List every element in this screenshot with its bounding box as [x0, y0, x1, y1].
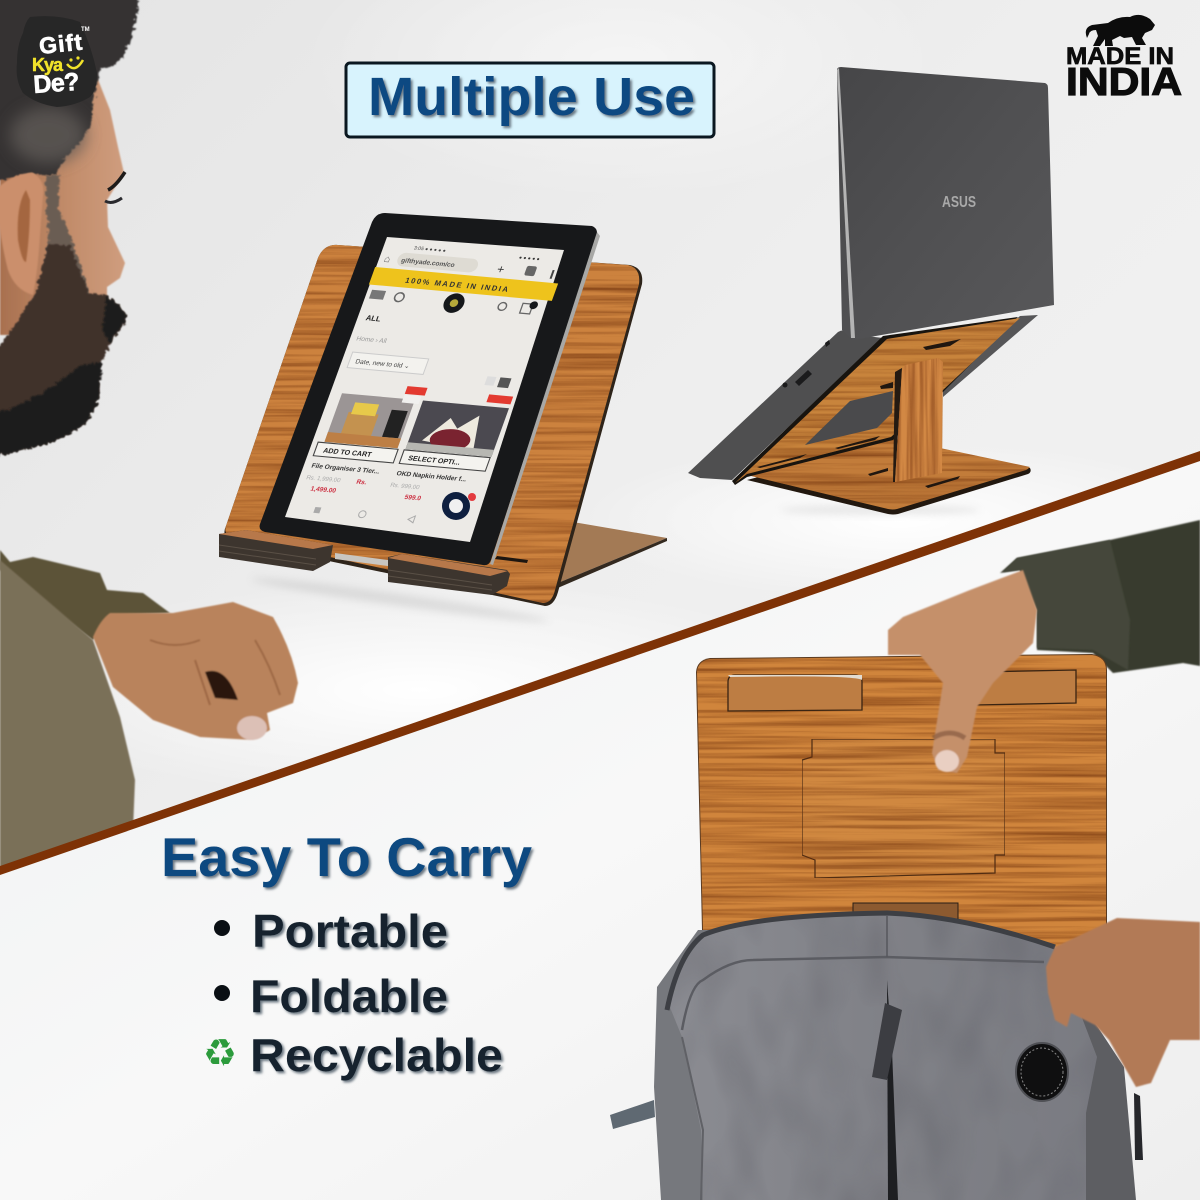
- head: [0, 0, 138, 460]
- item: Recyclable: ♻: [203, 1031, 237, 1075]
- folded wooden stand: [696, 654, 1107, 950]
- brow and lash: [108, 172, 125, 190]
- back panel: [1080, 1000, 1136, 1200]
- Made in India badge: MADE IN: [1066, 43, 1174, 70]
- tablet screen: Date, new to old ⌄: [354, 359, 411, 370]
- tablet screen: SELECT OPTI...: [407, 454, 461, 467]
- hand: [93, 602, 298, 740]
- clip left: [728, 675, 862, 711]
- tablet screen: +: [495, 262, 507, 276]
- stand top plate: [732, 317, 1018, 485]
- right zipper: [1134, 1093, 1143, 1160]
- top hair: [0, 0, 138, 190]
- item: Foldable: Foldable: [250, 970, 448, 1022]
- diagonal divider and lower background: [0, 451, 1200, 1200]
- tablet screen: ⌂: [382, 254, 392, 265]
- face skin: [0, 60, 125, 335]
- chat bubble: [442, 492, 470, 520]
- slot near base: [495, 556, 528, 563]
- lower hand: [1046, 918, 1200, 1087]
- tablet screen: Rs.: [355, 479, 368, 486]
- lower slot: [853, 903, 958, 919]
- beard: [0, 245, 127, 460]
- Made in India badge: [1066, 15, 1182, 104]
- tablet screen: File Organiser 3 Tier...: [310, 463, 381, 476]
- feature list: [203, 905, 503, 1081]
- logo: Gift Kya De: De?: [32, 68, 80, 99]
- laptop body right: [943, 315, 1038, 397]
- gripping hand: [888, 570, 1037, 773]
- silver tablet foot: [335, 553, 388, 566]
- desk shadow under tablet stand: [262, 578, 540, 622]
- stand back board: [224, 245, 642, 606]
- ear: [0, 173, 43, 295]
- centre panel outline: [802, 739, 1005, 878]
- logo: Gift Kya De: Kya: [32, 55, 64, 75]
- slots: [757, 339, 961, 488]
- stand base plate: [747, 442, 1031, 514]
- tablet screen: Home › All: [355, 336, 388, 345]
- tablet stand: [219, 213, 667, 606]
- laptop lid: [837, 67, 1054, 340]
- sleeve and cuff: [0, 550, 170, 640]
- support post: [893, 368, 902, 482]
- zip edge: [667, 913, 1055, 1010]
- tablet screen: 599.0: [403, 494, 422, 502]
- logo: Gift Kya De: TM: [81, 27, 90, 33]
- tablet screen: gifthyade.com/co: [400, 257, 456, 269]
- laptop ports: [795, 340, 830, 386]
- centre zipper slit: [887, 980, 898, 1200]
- tablet: [260, 213, 600, 565]
- arm and stand carried into bag: [610, 520, 1200, 1200]
- laptop body left: [688, 330, 883, 480]
- tablet screen: 1,499.00: [309, 486, 337, 495]
- stand base: [520, 522, 667, 585]
- tablet screen: ALL: [365, 313, 383, 323]
- icon: lion: [1086, 15, 1155, 46]
- item: Portable: Portable: [252, 905, 448, 957]
- man at desk: [0, 0, 980, 880]
- clip right: [975, 670, 1076, 705]
- zip pull: [872, 1003, 902, 1080]
- front panel: [667, 913, 1097, 1200]
- tablet screen: [285, 237, 567, 542]
- tablet screen: Rs. 1,999.00: [305, 474, 342, 484]
- tablet screen: 3:05 ● ● ● ● ●: [413, 246, 447, 254]
- holder pegs: [219, 530, 510, 595]
- product 2: [406, 400, 509, 457]
- sideburn: [44, 174, 90, 294]
- item: Recyclable: Recyclable: [250, 1029, 503, 1081]
- side strap: [610, 1100, 655, 1129]
- laptop on stand: [688, 67, 1054, 514]
- backpack: [610, 913, 1143, 1200]
- title box: Multiple Use: Multiple Use: [368, 67, 695, 127]
- dark window: [805, 391, 893, 445]
- tablet screen: OKD Napkin Holder f...: [395, 470, 468, 483]
- laptop lid: ASUS: [942, 194, 976, 211]
- sleeve: [1000, 520, 1200, 673]
- logo: Gift Kya De: [17, 16, 97, 107]
- round badge: [1016, 1043, 1068, 1101]
- tablet screen: Rs. 999.00: [389, 482, 421, 491]
- Made in India badge: INDIA: [1066, 61, 1182, 104]
- heading: Easy To Carry: Easy To Carry: [161, 826, 532, 888]
- tablet screen: ADD TO CART: [322, 447, 373, 459]
- desk shadow under laptop stand: [780, 505, 980, 515]
- logo: Gift Kya De: Gift: [38, 29, 84, 59]
- product 1: [324, 393, 415, 448]
- tablet screen: 100% MADE IN INDIA: [404, 276, 511, 294]
- shirt shoulder: [0, 560, 135, 880]
- tablet screen: ● ● ● ● ●: [518, 255, 540, 263]
- panel seam: [682, 957, 1044, 1030]
- bag side: [654, 930, 720, 1200]
